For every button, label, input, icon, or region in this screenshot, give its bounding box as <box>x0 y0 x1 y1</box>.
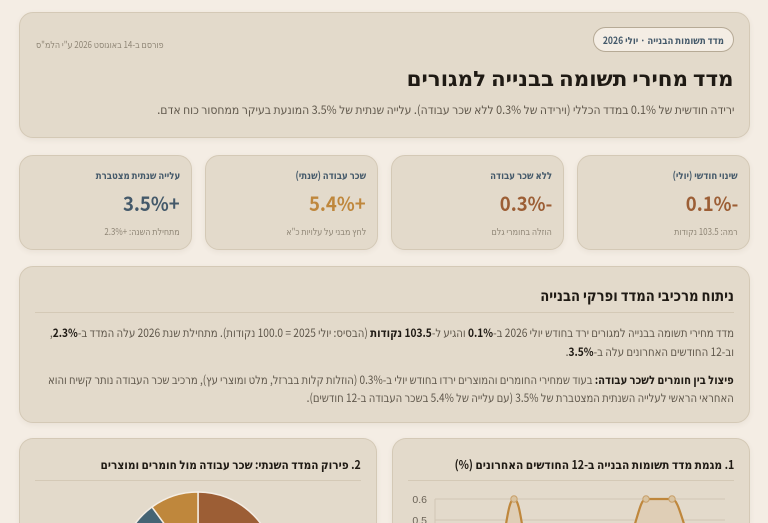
analysis paragraph 1: וב-12 החודשים האחרונים עלה ב-3.5%. <box>566 344 734 360</box>
badge: index and date: מדד תשומות הבנייה · יולי 2026 <box>603 32 724 46</box>
stat card: annual wages <box>205 155 378 250</box>
analysis paragraph 2 <box>48 372 734 406</box>
value: +‏5.4% <box>309 188 366 217</box>
analysis paragraph 1 <box>50 325 734 360</box>
panel: pie chart <box>19 438 377 523</box>
analysis heading: ניתוח מרכיבי המדד ופרקי הבנייה <box>540 284 734 306</box>
analysis paragraph 2: פיצול בין חומרים לשכר עבודה: בעוד שמחירי החומרים והמוצרים ירדו בחודש יולי ב-0.3% (הוזלות קלות בברזל, מלט ומוצרי עץ), מרכיב שכר העבודה נותר קשיח והוא <box>48 372 734 388</box>
stat card: cumulative annual rise <box>19 155 192 250</box>
slice: slate <box>120 507 198 523</box>
trend line <box>505 499 686 523</box>
slice: gold <box>152 492 198 523</box>
chart heading: 2. פירוק המדד השנתי: שכר עבודה מול חומרים ומוצרים <box>101 456 361 473</box>
label: עלייה שנתית מצטברת <box>96 167 180 182</box>
area fill <box>505 499 686 523</box>
stat card: excluding wages <box>391 155 564 250</box>
label: ללא שכר עבודה <box>490 167 552 182</box>
label: שינוי חודשי (יולי) <box>673 167 738 182</box>
title: מדד מחירי תשומה בבנייה למגורים <box>407 63 734 93</box>
stat card: monthly change <box>577 155 750 250</box>
pie chart <box>135 491 261 523</box>
line chart <box>412 494 725 523</box>
publication date: פורסם ב-14 באוגוסט 2026 ע"י הלמ"ס <box>36 37 164 51</box>
label: שכר עבודה (שנתי) <box>295 167 366 182</box>
note: הוזלה בחומרי גלם <box>492 224 552 238</box>
chart heading: 1. מגמת מדד תשומות הבנייה ב-12 החודשים האחרונים (%) <box>454 456 734 473</box>
analysis paragraph 1: מדד מחירי תשומה בבנייה למגורים ירד בחודש יולי 2026 ב-0.1% והגיע ל-103.5 נקודות (הבסיס: יולי 2025 = 100.0 נקודות). מתחילת שנת 2026 עלה המדד ב-2.3%, <box>50 325 734 341</box>
slice: brown <box>120 492 276 523</box>
y axis labels: 0.6 <box>412 494 427 506</box>
subtitle: ירידה חודשית של 0.1% במדד הכללי (וירידה של 0.3% ללא שכר עבודה). עלייה שנתית של 3.5% המונעת בעיקר ממחסור כוח אדם. <box>157 102 734 118</box>
badge: index and date <box>593 27 734 52</box>
value: -‏0.3% <box>499 188 552 217</box>
analysis paragraph 2: האחראי הראשי לעלייה השנתית המצטברת של 3.5% (עם עלייה של 5.4% בשכר העבודה ב-12 חודשים). <box>307 390 734 406</box>
value: -‏0.1% <box>685 188 738 217</box>
value: +‏3.5% <box>123 188 180 217</box>
panel: analysis <box>19 266 750 423</box>
y axis labels <box>412 494 427 523</box>
panel: line chart <box>392 438 750 523</box>
data points <box>511 496 675 502</box>
note: לחץ מבני על עלויות כ"א <box>286 224 366 238</box>
note: רמה: 103.5 נקודות <box>674 224 738 238</box>
note: מתחילת השנה: +‏2.3% <box>105 224 180 238</box>
panel: header <box>19 12 750 138</box>
